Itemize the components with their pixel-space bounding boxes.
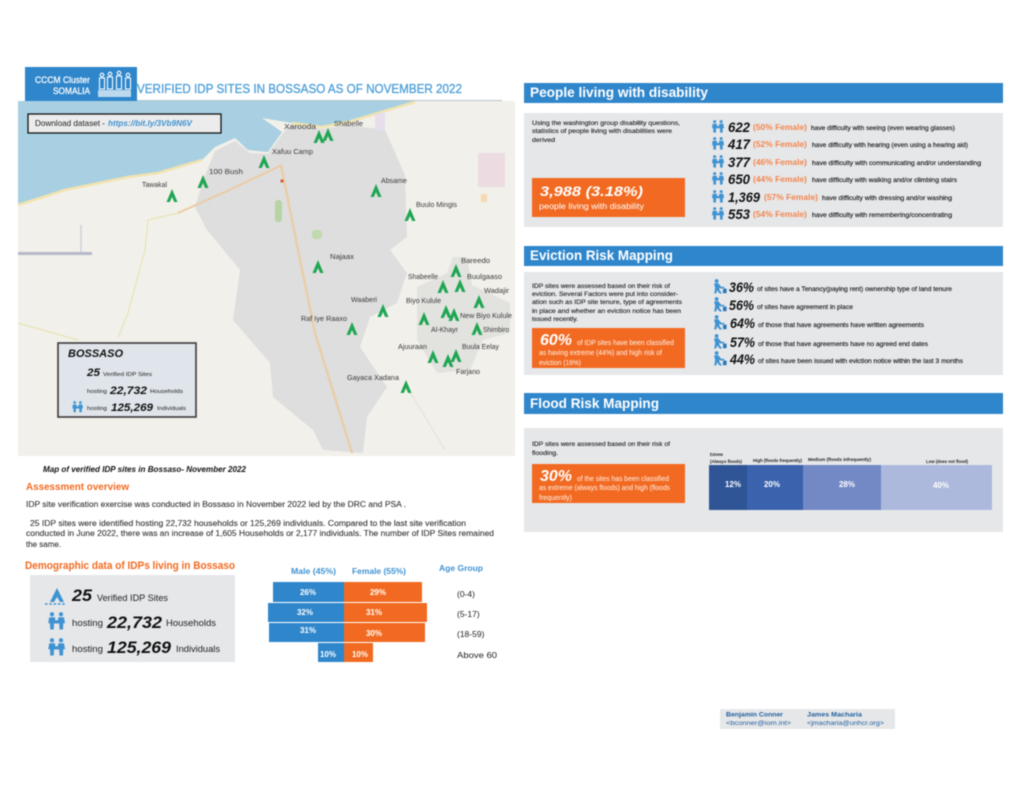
chart: population pyramid: Above 60	[457, 650, 497, 660]
callout: 30%	[532, 464, 685, 503]
site labels: Raf Iye Raaxo	[301, 314, 347, 323]
logo block: CCCM Cluster Somalia: CCCM Cluster	[35, 75, 90, 85]
chart: population pyramid: 30%	[366, 629, 382, 638]
contacts	[720, 709, 895, 729]
assessment text: the same.	[26, 539, 61, 549]
Bossaso summary box: 25	[86, 367, 101, 379]
eviction rows: 57%	[730, 334, 755, 350]
site labels: Bareedo	[461, 256, 490, 265]
chart: population pyramid	[268, 564, 497, 662]
site labels: New Biyo Kulule	[460, 311, 512, 320]
contacts: Benjamin Conner	[726, 712, 783, 718]
callout: 3,988: people living with disability	[539, 202, 644, 211]
panel: demographic summary: 22,732	[106, 613, 163, 632]
chart: population pyramid: Male (45%)	[291, 567, 336, 576]
chart: flood risk stacked bar: 40%	[933, 481, 949, 490]
site labels	[142, 119, 512, 382]
chart: flood risk stacked bar: Extreme	[710, 452, 723, 458]
panel: demographic summary: 125,269	[107, 638, 172, 657]
disability rows: (57% Female)	[764, 192, 818, 202]
eviction rows: of sites have agreement in place	[757, 304, 853, 311]
disability rows: 417	[727, 136, 751, 152]
chart: population pyramid: (18-59)	[457, 629, 485, 639]
chart: population pyramid: 31%	[300, 626, 316, 635]
Bossaso summary box: hosting	[87, 406, 107, 412]
intro text: ation such as IDP site tenure, type of agreements	[532, 299, 683, 306]
eviction rows: of sites have been issued with eviction notice within the last 3 months	[758, 358, 964, 365]
panel: eviction risk mapping	[524, 272, 1003, 375]
site labels: 100 Bush	[209, 167, 243, 176]
header: people living with disability: People living with disability	[530, 84, 708, 100]
contacts: <jmacharia@unhcr.org>	[807, 720, 884, 727]
site labels: Wadajir	[484, 286, 509, 295]
header: flood risk mapping	[524, 393, 1003, 414]
intro text	[532, 283, 683, 323]
map caption: Map of verified IDP sites in Bossaso- November 2022	[43, 465, 246, 474]
callout: 30%: 30%	[540, 468, 572, 485]
disability rows: 377	[728, 154, 751, 170]
eviction rows: 44%	[729, 351, 755, 367]
site labels: Farjano	[456, 367, 480, 376]
intro text: issued recently.	[532, 316, 578, 323]
download dataset box	[28, 114, 221, 133]
chart: flood risk stacked bar: 28%	[839, 480, 855, 489]
site labels: Buula Eelay	[462, 342, 499, 351]
chart: population pyramid: Age Group	[439, 564, 483, 573]
site labels: Xafuu Camp	[272, 147, 313, 156]
chart: flood risk stacked bar	[709, 452, 992, 510]
chart: flood risk stacked bar: (Always floods)	[710, 459, 742, 465]
disability rows: (50% Female)	[753, 122, 807, 132]
eviction rows: 64%	[730, 315, 755, 331]
title rule	[137, 100, 502, 101]
chart: flood risk stacked bar: 20%	[764, 480, 780, 489]
disability rows: have difficulty with remembering/concentrating	[812, 212, 952, 219]
disability rows: (44% Female)	[753, 174, 807, 184]
chart: flood risk stacked bar: Medium (floods infrequently)	[808, 457, 871, 463]
Bossaso summary box: hosting	[87, 389, 107, 395]
disability rows: have difficulty with walking and/or climbing stairs	[812, 177, 958, 184]
city built-up area	[195, 125, 407, 453]
callout: 60%: 60%	[540, 332, 572, 349]
site labels: Absame	[381, 176, 407, 185]
intro text: Using the washington group disability questions,	[532, 120, 680, 127]
site labels: Xarooda	[284, 122, 317, 131]
callout: 60%: as having extreme (44%) and high risk of	[539, 348, 663, 357]
eviction rows: of those that have agreements have written agreements	[758, 322, 925, 329]
logo block: CCCM Cluster Somalia	[25, 67, 137, 101]
roads	[18, 165, 445, 453]
chart: population pyramid: 32%	[297, 608, 313, 617]
site labels: Al-Khayr	[431, 325, 458, 334]
assessment text: conducted in June 2022, there was an increase of 1,605 Households or 2,177 individuals. The number of IDP Sites remained	[26, 528, 494, 538]
disability rows: 553	[728, 206, 750, 222]
disability rows: 650	[728, 171, 750, 187]
header: people living with disability	[524, 83, 1003, 103]
logo block: CCCM Cluster Somalia: SOMALIA	[53, 86, 90, 96]
intro text: eviction. Several Factors were put into consider-	[532, 291, 678, 298]
icon: tent	[45, 588, 66, 604]
callout: 30%: frequently)	[539, 493, 572, 502]
intro text: IDP sites were assessed based on their risk of	[532, 441, 670, 448]
site labels: Tawakal	[142, 180, 167, 189]
download dataset box: Download dataset -	[35, 118, 105, 128]
sea	[18, 101, 415, 205]
callout: 3,988: 3,988 (3.18%)	[540, 184, 644, 199]
eastern built-up area	[417, 257, 510, 373]
assessment text: IDP site verification exercise was conducted in Bossaso in November 2022 led by the DRC and PSA .	[26, 499, 406, 509]
heading: demographic data: Demographic data of IDPs living in Bossaso	[25, 560, 235, 572]
site markers	[166, 128, 484, 393]
panel: demographic summary: 25	[71, 586, 93, 605]
callout: 30%: as extreme (always floods) and high (floods	[539, 483, 670, 492]
contacts: James Macharia	[807, 712, 862, 718]
header: eviction risk mapping	[524, 246, 1003, 266]
chart: population pyramid: 31%	[366, 608, 382, 617]
site labels: Waaberi	[351, 295, 377, 304]
map of Bossaso	[18, 101, 515, 456]
chart: population pyramid: (0-4)	[457, 589, 475, 599]
panel: flood risk mapping	[524, 428, 1003, 532]
chart: population pyramid: 26%	[300, 588, 316, 597]
disability rows: (46% Female)	[753, 157, 807, 167]
intro text: flooding.	[532, 450, 558, 457]
panel: demographic summary: hosting	[72, 618, 103, 629]
disability rows: have difficulty with communicating and/or understanding	[812, 160, 981, 167]
eviction rows: of sites have a Tenancy(paying rent) ownership type of land tenure	[757, 286, 952, 293]
intro text: derived	[532, 137, 555, 144]
Bossaso summary box: 22,732	[109, 385, 147, 397]
intro text: statistics of people living with disabilities were	[532, 128, 672, 135]
Bossaso summary box: Individuals	[157, 406, 186, 412]
assessment text	[26, 499, 494, 549]
panel: people living with disability	[524, 113, 1003, 227]
site labels: Buulo Mingis	[416, 200, 457, 209]
chart: flood risk stacked bar: Low (does not flood)	[926, 459, 968, 465]
heading: assessment overview: Assessment overview	[26, 482, 129, 493]
disability rows: (54% Female)	[753, 209, 807, 219]
Bossaso summary box: Households	[150, 389, 183, 395]
eviction rows	[714, 279, 964, 367]
disability rows: 1,369	[728, 189, 760, 205]
Bossaso summary box: 125,269	[111, 402, 154, 414]
Bossaso summary box: Verified IDP Sites	[103, 372, 152, 378]
callout: 60%: of IDP sites have been classified	[577, 338, 674, 347]
eviction rows: of those that have agreements have no agreed end dates	[758, 341, 929, 348]
site labels: Shabeelle	[408, 272, 438, 281]
panel: demographic summary: Individuals	[176, 644, 220, 655]
panel: demographic summary: hosting	[72, 644, 103, 655]
intro text: in place and whether an eviction notice has been	[532, 308, 681, 315]
disability rows: have difficulty with dressing and/or washing	[822, 195, 952, 202]
Bossaso summary box: BOSSASO	[68, 348, 123, 360]
chart: population pyramid: Female (55%)	[352, 567, 406, 576]
callout: 3,988	[532, 178, 685, 217]
title: VERIFIED IDP SITES IN BOSSASO AS OF NOVEMBER 2022	[137, 81, 462, 96]
disability rows: 622	[728, 119, 750, 135]
chart: population pyramid: 29%	[370, 588, 386, 597]
site labels: Gayaca Xadana	[347, 373, 400, 382]
assessment text: 25 IDP sites were identified hosting 22,732 households or 125,269 individuals. Compared to the last site verification	[30, 518, 466, 528]
chart: population pyramid: 10%	[352, 650, 368, 659]
disability rows: have difficulty with seeing (even wearing glasses)	[811, 125, 955, 132]
parks	[275, 200, 282, 222]
callout: 60%: eviction (16%)	[539, 358, 581, 367]
disability rows: (52% Female)	[753, 139, 807, 149]
eviction rows: 56%	[729, 297, 754, 313]
disability rows: have difficulty with hearing (even using a hearing aid)	[812, 142, 968, 149]
panel: demographic summary: Verified IDP Sites	[97, 593, 168, 604]
site labels: Ajuuraan	[398, 342, 427, 351]
callout: 30%: of the sites has been classified	[577, 474, 669, 483]
panel: demographic summary: Households	[166, 618, 216, 629]
callout: 60%	[532, 328, 685, 368]
eviction rows: 36%	[729, 279, 754, 295]
intro text	[532, 120, 680, 144]
chart: population pyramid: (5-17)	[457, 609, 480, 619]
site labels: Buulgaaso	[467, 272, 502, 281]
header: eviction risk mapping: Eviction Risk Mapping	[530, 247, 673, 263]
Bossaso summary box	[58, 343, 196, 417]
contacts: <bconner@iom.int>	[726, 720, 791, 727]
download dataset box: https://bit.ly/3Vb9N6V	[108, 118, 193, 128]
intro text	[532, 441, 670, 457]
chart: flood risk stacked bar: 12%	[725, 480, 741, 489]
chart: flood risk stacked bar: High (floods frequently)	[753, 458, 802, 464]
site labels: Biyo Kulule	[406, 296, 441, 305]
chart: population pyramid: 10%	[320, 650, 336, 659]
header: flood risk mapping: Flood Risk Mapping	[530, 395, 659, 411]
site labels: Najaax	[330, 252, 354, 261]
panel: demographic summary	[30, 575, 235, 662]
site labels: Shimbiro	[483, 325, 509, 334]
disability rows	[712, 119, 981, 222]
intro text: IDP sites were assessed based on their risk of	[532, 283, 670, 290]
site labels: Shabelle	[334, 119, 363, 128]
